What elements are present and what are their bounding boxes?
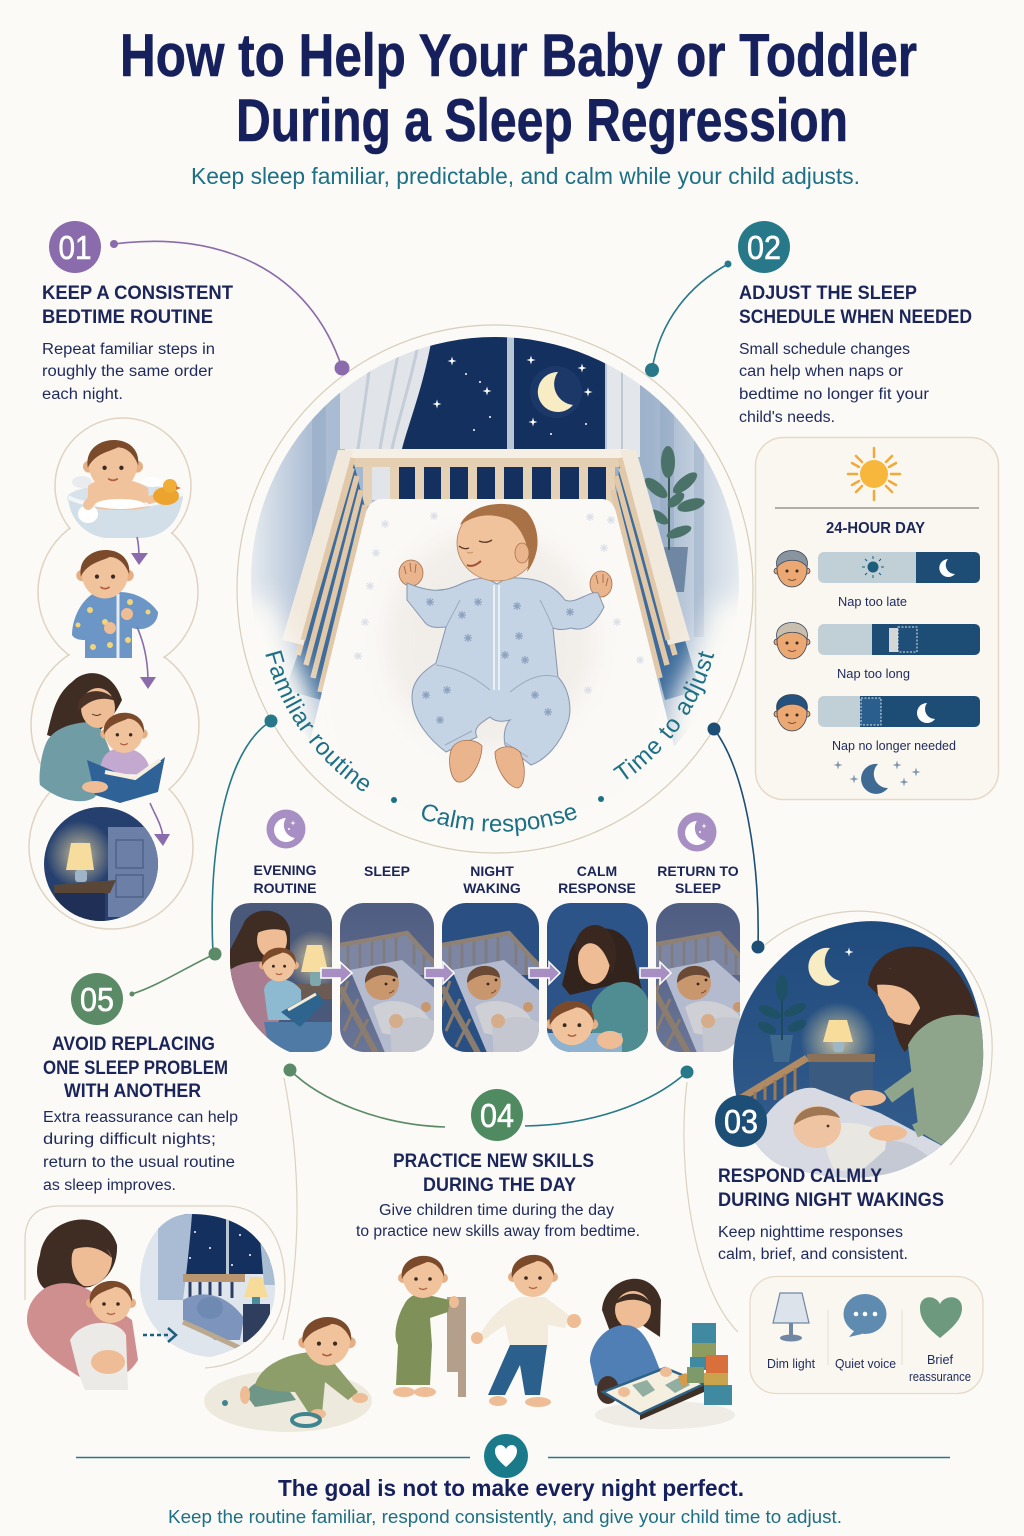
body 05: as sleep improves.: [43, 1177, 176, 1194]
tool labels: Dim light: [767, 1357, 816, 1371]
heading 03: DURING NIGHT WAKINGS: [718, 1190, 944, 1211]
connector nodes: [110, 240, 764, 1078]
badge 04: [471, 1089, 523, 1141]
icon: moon and stars: [834, 760, 920, 794]
body 05: during difficult nights;: [43, 1131, 216, 1148]
row: nap no longer needed: [774, 694, 980, 753]
row: nap too long: Nap too long: [837, 667, 910, 681]
baby: [385, 504, 612, 788]
row: nap too late: Nap too late: [838, 595, 907, 609]
step 01: [42, 221, 233, 403]
step labels: RESPONSE: [558, 880, 636, 896]
heading 04: PRACTICE NEW SKILLS: [393, 1151, 594, 1172]
badge 02: 02: [747, 229, 781, 266]
icon: reassurance heart: [920, 1297, 962, 1338]
body 04: to practice new skills away from bedtime.: [356, 1223, 640, 1240]
heading 01: KEEP A CONSISTENT: [42, 283, 233, 304]
body 01: Repeat familiar steps in: [42, 341, 215, 358]
mattress: [310, 499, 674, 825]
step labels: CALM: [577, 863, 617, 879]
heading: 24-hour day: 24-HOUR DAY: [826, 520, 926, 537]
step labels: [253, 862, 739, 896]
icon: heart badge: [484, 1434, 528, 1478]
badge 03: 03: [724, 1103, 758, 1140]
subtitle: Keep sleep familiar, predictable, and calm while your child adjusts.: [191, 163, 860, 189]
step 03: [715, 915, 990, 1394]
arrow: dashed transition: [143, 1328, 176, 1342]
icon: quiet voice: [844, 1294, 886, 1337]
tool labels: Brief: [927, 1353, 954, 1367]
footer: [76, 1434, 950, 1527]
badge 03: [715, 1095, 767, 1147]
step 02: [738, 221, 972, 426]
baby: [793, 1106, 887, 1172]
panel: return to sleep: [656, 903, 740, 1052]
heading 02: [739, 283, 972, 328]
curved caption: Calm response: Calm response: [422, 804, 577, 836]
body 04: Give children time during the day: [379, 1202, 614, 1219]
body 03: [718, 1224, 908, 1263]
body 02: bedtime no longer fit your: [739, 386, 929, 403]
icon: dim light: [773, 1293, 809, 1342]
illustration: bath: [67, 440, 183, 538]
row: nap no longer needed: Nap no longer needed: [832, 739, 956, 753]
panel outline: [25, 1206, 285, 1368]
heading 04: DURING THE DAY: [423, 1175, 576, 1196]
connector lines: [114, 241, 992, 1340]
flow arrows: [321, 962, 671, 984]
mattress stars: [354, 512, 644, 694]
arrow: step one to two: [131, 537, 148, 565]
badge 05: 05: [80, 981, 114, 1018]
heading 03: [718, 1166, 944, 1211]
body 05: [43, 1109, 238, 1194]
badge 01: [49, 221, 101, 273]
step labels: WAKING: [463, 880, 521, 896]
badge 05: [71, 973, 123, 1025]
body 03: Keep nighttime responses: [718, 1224, 903, 1241]
panel: sleep: [340, 903, 434, 1052]
panel: calm response: [546, 903, 648, 1055]
illustration: child with book and blocks: [590, 1279, 735, 1429]
heading 04: [393, 1151, 594, 1196]
heading 01: BEDTIME ROUTINE: [42, 307, 213, 328]
row: nap too late: [774, 550, 980, 609]
badge 02: [738, 221, 790, 273]
tool labels: reassurance: [909, 1370, 971, 1384]
panel: 24-hour day: [756, 438, 998, 800]
parent: [850, 947, 985, 1150]
tool labels: [767, 1353, 971, 1384]
body 04: [356, 1202, 640, 1240]
body 05: return to the usual routine: [43, 1154, 235, 1171]
heading 05: AVOID REPLACING: [52, 1034, 215, 1055]
step labels: SLEEP: [364, 863, 410, 879]
badge 01: 01: [58, 229, 92, 266]
row: nap too long: [774, 622, 980, 681]
body 02: Small schedule changes: [739, 341, 910, 358]
step labels: RETURN TO: [657, 863, 739, 879]
plant and pot: [756, 975, 808, 1062]
illustration: calm night response: [732, 921, 984, 1178]
title: During a Sleep Regression: [236, 87, 848, 154]
routine bubbles: [29, 418, 199, 929]
central illustration: sleeping baby in crib: [251, 337, 739, 788]
body 01: [42, 341, 215, 403]
heading 05: [43, 1034, 228, 1102]
wall: [251, 384, 739, 746]
heading 02: SCHEDULE WHEN NEEDED: [739, 307, 972, 328]
blocks: [687, 1323, 732, 1405]
illustration: parent holding baby: [27, 1220, 138, 1390]
step 04: [204, 1089, 735, 1432]
curtain: [340, 337, 432, 500]
heading 05: WITH ANOTHER: [64, 1081, 201, 1102]
panel: night waking: [442, 903, 539, 1052]
step labels: EVENING: [253, 862, 317, 878]
illustration: walking toddler: [471, 1255, 581, 1407]
badge 04: 04: [480, 1097, 514, 1134]
step labels: SLEEP: [675, 880, 721, 896]
closing message: The goal is not to make every night perfect.: [278, 1475, 744, 1501]
panel: calm tools: [750, 1276, 983, 1394]
body 03: calm, brief, and consistent.: [718, 1246, 908, 1263]
heading 02: ADJUST THE SLEEP: [739, 283, 917, 304]
illustration: reading with parent: [39, 673, 165, 803]
curved caption: Familiar routine: Familiar routine: [266, 650, 370, 791]
icon: sun: [848, 448, 900, 500]
icon: moon badge right: [678, 812, 716, 852]
body 02: [739, 341, 929, 426]
body 01: each night.: [42, 386, 123, 403]
icon: moon badge left: [266, 810, 306, 848]
heading 01: [42, 283, 233, 328]
illustration: crawling baby: [204, 1317, 372, 1432]
night sequence: [230, 810, 752, 1058]
crib back rail: [345, 449, 630, 506]
heading 03: RESPOND CALMLY: [718, 1166, 882, 1187]
plant: [641, 446, 706, 592]
arrow: step three to four: [150, 803, 170, 846]
heading 05: ONE SLEEP PROBLEM: [43, 1058, 228, 1079]
body 02: child's needs.: [739, 409, 835, 426]
body 02: can help when naps or: [739, 363, 903, 380]
arrow: step two to three: [137, 627, 156, 689]
illustration: standing baby: [393, 1256, 466, 1397]
step labels: NIGHT: [470, 863, 514, 879]
illustration: dim room: [44, 807, 158, 923]
step 05: [25, 973, 285, 1390]
panel: evening routine: [230, 903, 332, 1052]
night window: [398, 337, 640, 502]
body 05: Extra reassurance can help: [43, 1109, 238, 1126]
illustration: bedroom window bubble: [140, 1214, 275, 1359]
caption separators: [391, 796, 604, 803]
central ring: [237, 325, 753, 853]
tool labels: Quiet voice: [835, 1357, 896, 1371]
curved caption: Time to adjust: Time to adjust: [612, 651, 714, 780]
illustration: pajamas: [72, 550, 158, 658]
step labels: ROUTINE: [254, 880, 316, 896]
crib side rails: [282, 450, 700, 700]
title: [120, 22, 917, 154]
closing sub-message: Keep the routine familiar, respond consistently, and give your child time to adjust.: [168, 1506, 842, 1527]
body 01: roughly the same order: [42, 363, 213, 380]
